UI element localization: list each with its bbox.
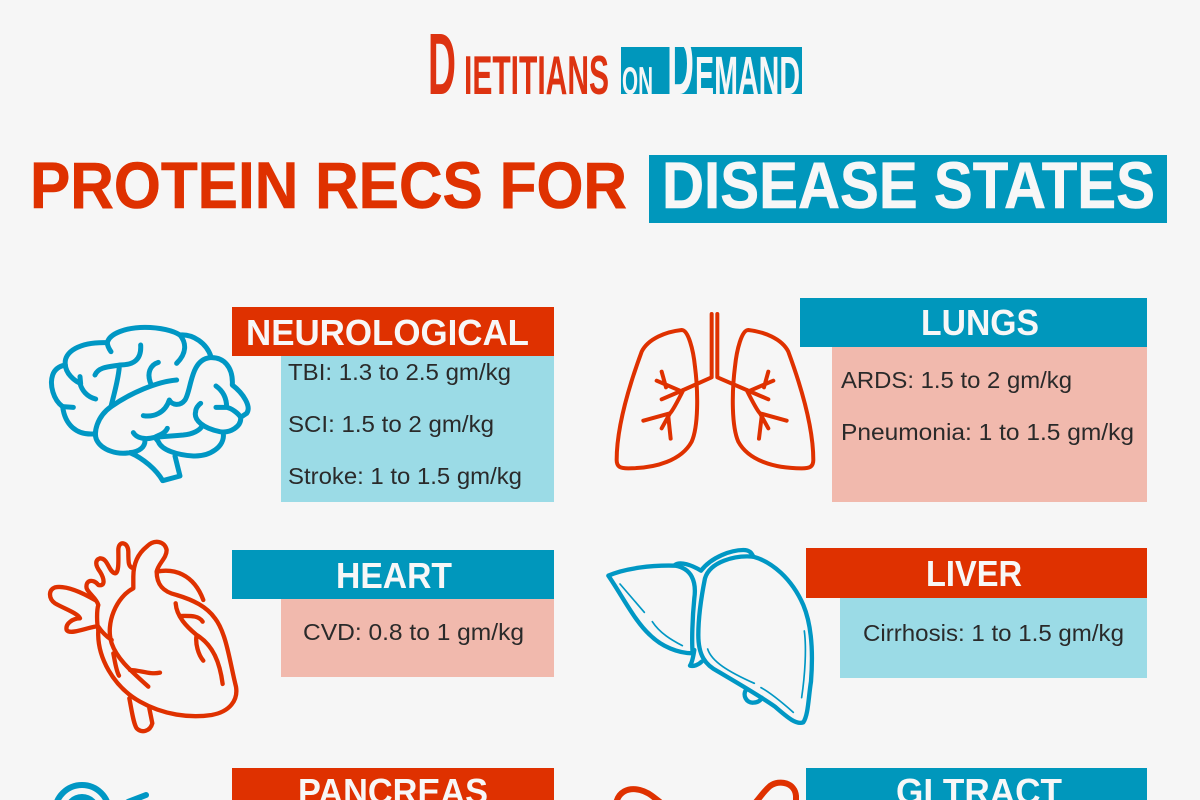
panel: neurological: TBI: 1.3 to 2.5 gm/kg: [288, 359, 511, 385]
panel: pancreas: [232, 768, 554, 800]
logo: Dietitians on Demand: ON: [622, 60, 653, 103]
panel: liver: [806, 548, 1147, 678]
panel: lungs: LUNGS: [921, 302, 1039, 343]
icon: GI tract: [616, 783, 796, 800]
panel: liver: LIVER: [926, 553, 1022, 594]
panel: neurological: Stroke: 1 to 1.5 gm/kg: [288, 463, 522, 489]
panel: liver: Cirrhosis: 1 to 1.5 gm/kg: [863, 620, 1124, 646]
icon: pancreas: [55, 785, 146, 800]
panel: lungs: ARDS: 1.5 to 2 gm/kg: [841, 367, 1072, 393]
panel: heart: [232, 550, 554, 677]
panel: neurological: NEUROLOGICAL: [246, 312, 529, 353]
title: PROTEIN RECS FOR: [30, 148, 627, 222]
logo: Dietitians on Demand: EMAND: [695, 46, 800, 106]
icon: heart: [50, 542, 236, 731]
title: [30, 148, 1167, 223]
panel: GI tract: [806, 768, 1147, 800]
logo: Dietitians on Demand: D: [667, 16, 694, 113]
panel: lungs: [800, 298, 1147, 502]
icon: lungs: [617, 314, 813, 468]
panel: heart: CVD: 0.8 to 1 gm/kg: [303, 619, 524, 645]
panel: neurological: SCI: 1.5 to 2 gm/kg: [288, 411, 494, 437]
logo: Dietitians on Demand: D: [428, 16, 456, 113]
logo: Dietitians on Demand: IETITIANS: [464, 44, 609, 106]
logo: Dietitians on Demand: [428, 16, 802, 113]
panel: heart: HEART: [336, 555, 452, 596]
panel: lungs: Pneumonia: 1 to 1.5 gm/kg: [841, 419, 1134, 445]
icon: brain: [52, 327, 248, 481]
panel: neurological: [232, 307, 554, 502]
icon: liver: [608, 550, 812, 723]
